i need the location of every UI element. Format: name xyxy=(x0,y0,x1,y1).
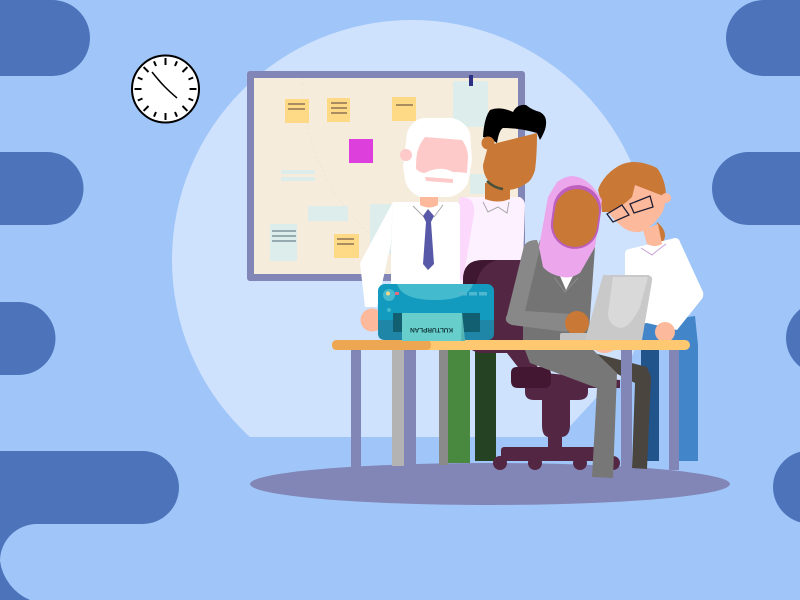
trousers xyxy=(475,340,496,461)
neck xyxy=(485,183,510,202)
face xyxy=(550,186,602,250)
green trouser leg xyxy=(448,345,470,463)
casters xyxy=(493,456,507,470)
pale note lines xyxy=(272,231,296,241)
lapels xyxy=(554,277,578,292)
torso xyxy=(523,240,595,345)
paper slot xyxy=(393,313,480,332)
mouth xyxy=(425,177,453,183)
man in pink shirt xyxy=(440,105,546,461)
hair xyxy=(598,162,666,212)
chair column xyxy=(542,400,570,447)
face xyxy=(416,137,468,173)
printer lid xyxy=(397,284,473,300)
noticeboard xyxy=(247,71,525,281)
arm xyxy=(360,202,393,307)
hand xyxy=(655,322,675,342)
chair seat xyxy=(525,373,620,388)
desk xyxy=(332,340,690,470)
tie xyxy=(423,209,434,270)
hijab inner xyxy=(548,182,604,252)
laptop keyboard xyxy=(560,333,600,342)
collar xyxy=(483,202,509,213)
wall clock xyxy=(132,56,199,122)
hair xyxy=(483,105,546,143)
seat base xyxy=(525,388,588,400)
beard shadow xyxy=(487,181,503,189)
ear xyxy=(661,193,671,203)
pale notes xyxy=(270,81,494,261)
glasses xyxy=(607,196,653,222)
neck xyxy=(420,190,438,208)
desk top xyxy=(332,340,690,350)
ponytail xyxy=(655,222,665,242)
older man xyxy=(360,118,472,340)
hand xyxy=(360,308,384,332)
printer xyxy=(378,284,494,341)
desk legs xyxy=(351,350,361,467)
magenta note xyxy=(349,139,373,163)
front leg xyxy=(523,345,617,478)
shirt xyxy=(625,238,703,330)
hand shadow xyxy=(595,350,614,353)
chair back xyxy=(463,260,545,380)
arm xyxy=(506,240,572,332)
collar xyxy=(413,205,443,217)
face xyxy=(607,183,665,232)
hand xyxy=(565,311,589,335)
woman in grey suit xyxy=(506,176,652,478)
floor shadow xyxy=(250,463,730,505)
paper xyxy=(402,313,465,341)
ear xyxy=(400,149,412,161)
back leg xyxy=(590,352,651,469)
shirt xyxy=(440,197,525,340)
lights xyxy=(383,289,395,301)
body xyxy=(391,202,460,340)
sleeve xyxy=(450,197,474,280)
hijab xyxy=(539,176,602,278)
woman with glasses xyxy=(598,162,703,461)
yellow note lines xyxy=(288,103,413,244)
printer body xyxy=(378,284,494,340)
laptop screen xyxy=(585,275,652,340)
ear xyxy=(482,136,494,150)
chair feet bar xyxy=(501,447,613,461)
paper label: KULTURPLAN xyxy=(410,326,453,333)
chair xyxy=(463,260,620,470)
trousers xyxy=(641,316,698,461)
pin xyxy=(469,75,473,86)
neck xyxy=(643,224,662,246)
light circle backdrop xyxy=(172,20,650,437)
yellow notes xyxy=(285,97,416,258)
hair and beard xyxy=(403,118,472,197)
head xyxy=(483,133,537,190)
